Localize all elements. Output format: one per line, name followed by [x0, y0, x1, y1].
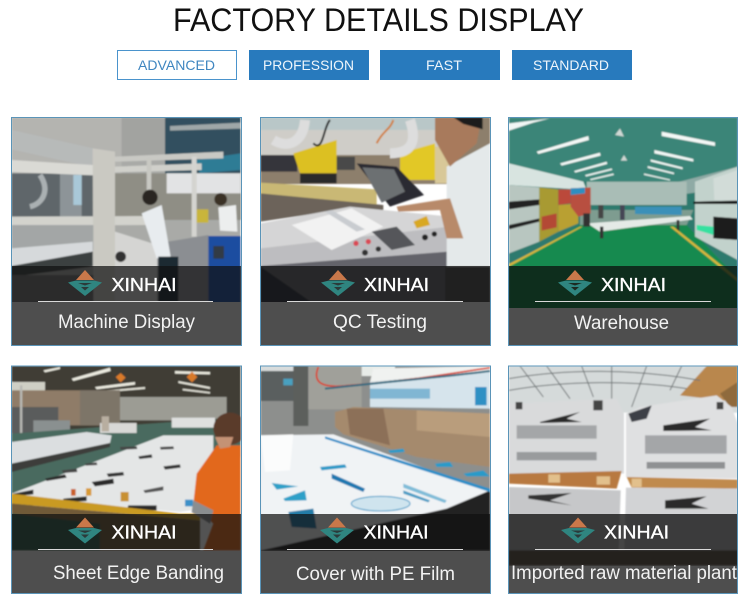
brand name: XINHAI: [364, 522, 428, 542]
tag: advanced: ADVANCED: [138, 57, 215, 73]
logo mark: [558, 270, 592, 296]
dark logo band: [508, 266, 738, 308]
caption: Machine Display: [58, 312, 195, 333]
dark logo band: [508, 514, 738, 566]
caption: Warehouse: [574, 313, 669, 334]
caption bar: [12, 302, 241, 345]
brand name: XINHAI: [604, 522, 669, 542]
panel: sheet edge banding: [12, 366, 247, 594]
brand name: XINHAI: [112, 274, 176, 295]
photo: banding hall with worker: [12, 366, 247, 550]
logo mark: [68, 270, 102, 296]
tag: profession: PROFESSION: [263, 57, 354, 73]
tag: fast: [380, 50, 500, 80]
logo mark: [68, 518, 102, 544]
caption bar: [12, 551, 241, 593]
brand name: XINHAI: [601, 274, 666, 295]
tag: standard: [512, 50, 632, 80]
tag: fast: FAST: [426, 57, 462, 73]
tag: standard: STANDARD: [533, 57, 609, 73]
caption bar: [261, 551, 490, 593]
panel: cover with pe film: [260, 366, 490, 594]
dark logo band: [261, 514, 490, 566]
panel: imported raw material plant: [508, 366, 738, 594]
panel: qc testing: [260, 117, 490, 346]
caption: Cover with PE Film: [296, 564, 455, 585]
caption bar: [508, 308, 738, 345]
dark logo band: [261, 266, 490, 302]
logo mark: [321, 270, 355, 296]
panel: machine display: [12, 117, 242, 346]
logo mark: [561, 518, 595, 544]
brand name: XINHAI: [364, 274, 429, 295]
photo: production line: [12, 117, 242, 304]
caption bar: [508, 566, 738, 593]
caption bar: [261, 302, 490, 345]
photo: technician with laptop: [261, 117, 490, 303]
caption: QC Testing: [333, 312, 427, 333]
caption: Imported raw material plant: [511, 563, 738, 584]
photo: film roller over white sheet: [261, 366, 490, 553]
tag: profession: [249, 50, 369, 80]
caption: Sheet Edge Banding: [53, 563, 224, 584]
dark logo band: [12, 514, 241, 551]
dark logo band: [12, 266, 241, 302]
panel: warehouse: [508, 117, 738, 346]
brand name: XINHAI: [112, 522, 176, 542]
tag: advanced: [118, 50, 236, 80]
tag row: [118, 50, 632, 80]
photo: green floor warehouse: [509, 117, 738, 317]
photo: stacked resin bags: [509, 366, 738, 565]
title: FACTORY DETAILS DISPLAY: [173, 2, 584, 38]
logo mark: [320, 518, 354, 544]
